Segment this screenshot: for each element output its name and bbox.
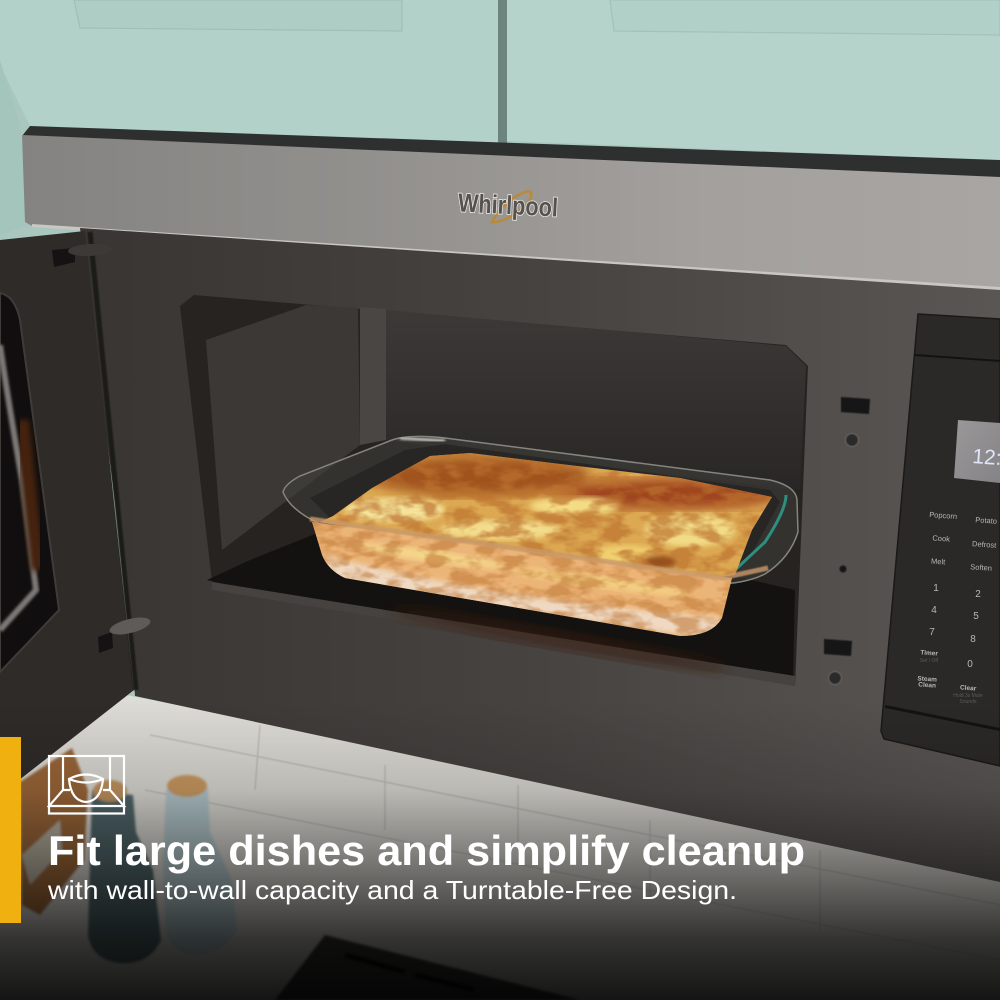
keypad labels: Clean bbox=[918, 681, 936, 690]
dark gradient overlay bbox=[0, 700, 1000, 1000]
latches and screws bbox=[824, 397, 870, 684]
microwave cavity bbox=[180, 295, 808, 686]
upper cabinets bbox=[0, 0, 1000, 235]
headline: Fit large dishes and simplify cleanup bbox=[48, 827, 805, 874]
stainless steel trim bbox=[22, 135, 1000, 290]
keypad labels: Hold 3s Mute bbox=[953, 693, 983, 699]
keypad labels: Defrost bbox=[972, 539, 997, 550]
wooden board bbox=[20, 748, 88, 915]
keypad labels: 4 bbox=[931, 605, 937, 616]
keypad labels: 2 bbox=[975, 589, 981, 600]
door hinges bbox=[52, 243, 152, 653]
keypad labels: Soften bbox=[970, 562, 992, 573]
keypad labels: Melt bbox=[931, 557, 946, 567]
Whirlpool logo: Whirlpool bbox=[457, 187, 559, 223]
control panel bbox=[881, 314, 1000, 766]
microwave front panel bbox=[80, 228, 1000, 882]
countertop items bbox=[20, 748, 237, 963]
keypad labels: 1 bbox=[933, 583, 939, 594]
icon: bowl in microwave bbox=[49, 756, 124, 814]
keypad labels: Sounds bbox=[960, 699, 977, 705]
yellow accent bar bbox=[0, 737, 21, 923]
lasagna side bbox=[310, 520, 740, 640]
keypad labels: 5 bbox=[973, 611, 979, 622]
keypad labels: 8 bbox=[970, 634, 976, 645]
keypad labels: Cook bbox=[932, 533, 950, 544]
keypad labels: Clear bbox=[960, 684, 977, 693]
glass front lip bbox=[310, 519, 768, 578]
keypad labels: 0 bbox=[967, 659, 973, 670]
glass dish of lasagna bbox=[283, 436, 798, 679]
subheading: with wall-to-wall capacity and a Turntable-Free Design. bbox=[47, 875, 737, 905]
glass rim bbox=[283, 436, 798, 584]
keypad labels bbox=[917, 510, 997, 705]
dark bottle bbox=[88, 780, 161, 963]
keypad labels: Timer bbox=[920, 649, 939, 658]
lasagna top bbox=[320, 453, 772, 577]
keypad labels: Set / Off bbox=[920, 658, 939, 664]
open microwave door bbox=[0, 231, 136, 795]
keypad labels: Popcorn bbox=[929, 510, 957, 521]
keypad labels: Steam bbox=[917, 675, 937, 684]
light bottle bbox=[163, 775, 237, 955]
display bbox=[954, 420, 1000, 483]
keypad labels: Potato bbox=[975, 515, 997, 526]
keypad labels: 7 bbox=[929, 627, 935, 638]
cooktop bbox=[275, 935, 580, 1000]
